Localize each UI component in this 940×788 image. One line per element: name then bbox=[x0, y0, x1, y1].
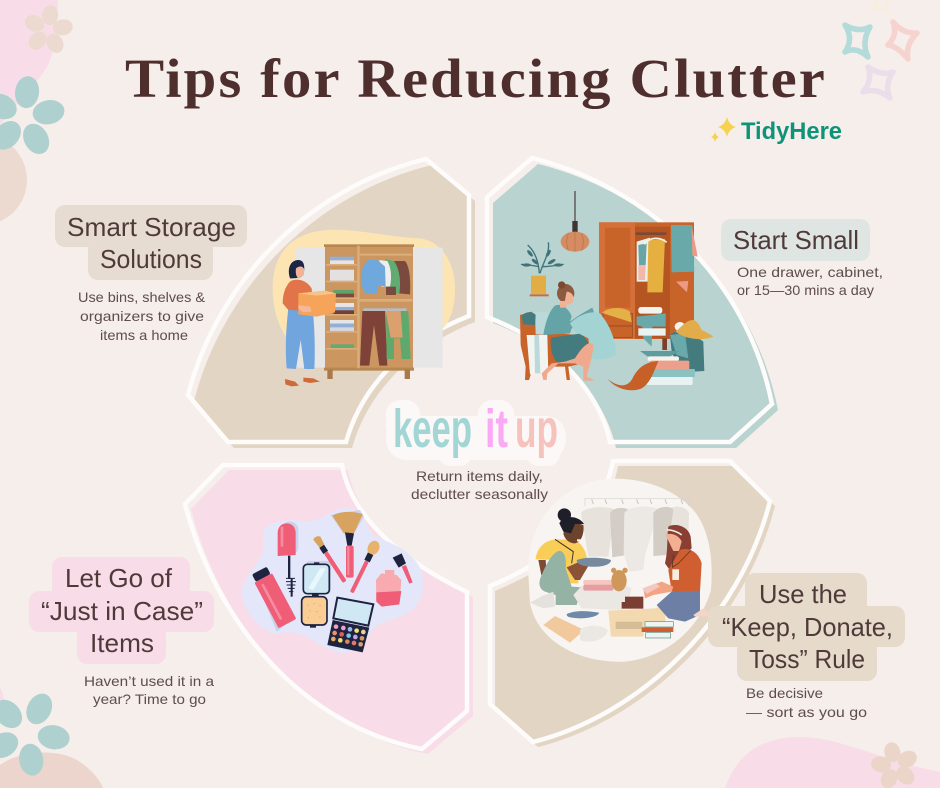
panel: start small quadrant bbox=[487, 158, 778, 448]
heading: start small bbox=[721, 219, 870, 261]
heading: smart storage solutions: Solutions bbox=[100, 244, 202, 274]
text: let go description: year? Time to go bbox=[93, 691, 206, 707]
text: keep donate toss description bbox=[746, 685, 867, 720]
panel: smart storage quadrant bbox=[188, 159, 475, 448]
heading: start small: Start Small bbox=[733, 225, 859, 255]
text: smart storage description: items a home bbox=[100, 327, 188, 343]
heading: let go of just in case items bbox=[29, 557, 214, 664]
decoration: bottom-left blob and flower bbox=[0, 687, 103, 788]
decoration: bottom-right blob and flower bbox=[725, 737, 940, 788]
center badge: keep it up: it bbox=[485, 399, 508, 459]
center badge: keep it up: keep bbox=[393, 399, 472, 459]
text: keep it up description: Return items daily, bbox=[416, 468, 543, 484]
text: keep donate toss description: — sort as you go bbox=[746, 704, 867, 720]
panel: let go quadrant bbox=[185, 465, 473, 754]
text: smart storage description bbox=[78, 289, 206, 343]
text: keep donate toss description: Be decisive bbox=[746, 685, 823, 701]
text: smart storage description: Use bins, shelves & bbox=[78, 289, 206, 305]
decoration: top-left blobs and flowers bbox=[0, 0, 74, 225]
illustration: woman with box at closet bbox=[273, 230, 455, 386]
center badge: keep it up bbox=[386, 399, 566, 466]
heading: smart storage solutions: Smart Storage bbox=[67, 212, 236, 242]
text: let go description: Haven’t used it in a bbox=[84, 673, 214, 689]
illustration: two people sorting clothes bbox=[528, 479, 712, 662]
text: keep it up description bbox=[411, 468, 548, 502]
text: smart storage description: organizers to give bbox=[80, 308, 204, 324]
center badge: keep it up: up bbox=[515, 399, 558, 459]
text: start small description: One drawer, cabinet, bbox=[737, 264, 883, 280]
heading: keep donate toss rule: Toss” Rule bbox=[749, 644, 865, 674]
heading: keep donate toss rule: “Keep, Donate, bbox=[722, 612, 893, 642]
illustration: makeup collection bbox=[242, 508, 423, 653]
panel: keep donate toss quadrant bbox=[490, 461, 775, 747]
text: start small description: or 15—30 mins a day bbox=[737, 282, 874, 298]
illustration: woman sorting clothes by wardrobe bbox=[520, 191, 713, 390]
heading: let go of just in case items: “Just in Case” bbox=[41, 596, 203, 626]
heading: keep donate toss rule: Use the bbox=[759, 579, 847, 609]
logo: TidyHere: TidyHere bbox=[741, 118, 842, 145]
title: Tips for Reducing Clutter bbox=[125, 48, 827, 109]
heading: let go of just in case items: Let Go of bbox=[65, 563, 173, 593]
text: let go description bbox=[84, 673, 214, 707]
decoration: sparkle outlines top-right bbox=[845, 0, 917, 98]
text: keep it up description: declutter seasonally bbox=[411, 486, 548, 502]
heading: smart storage solutions bbox=[55, 205, 247, 280]
heading: keep donate toss rule bbox=[708, 573, 905, 681]
heading: let go of just in case items: Items bbox=[90, 628, 154, 658]
text: start small description bbox=[737, 264, 883, 298]
